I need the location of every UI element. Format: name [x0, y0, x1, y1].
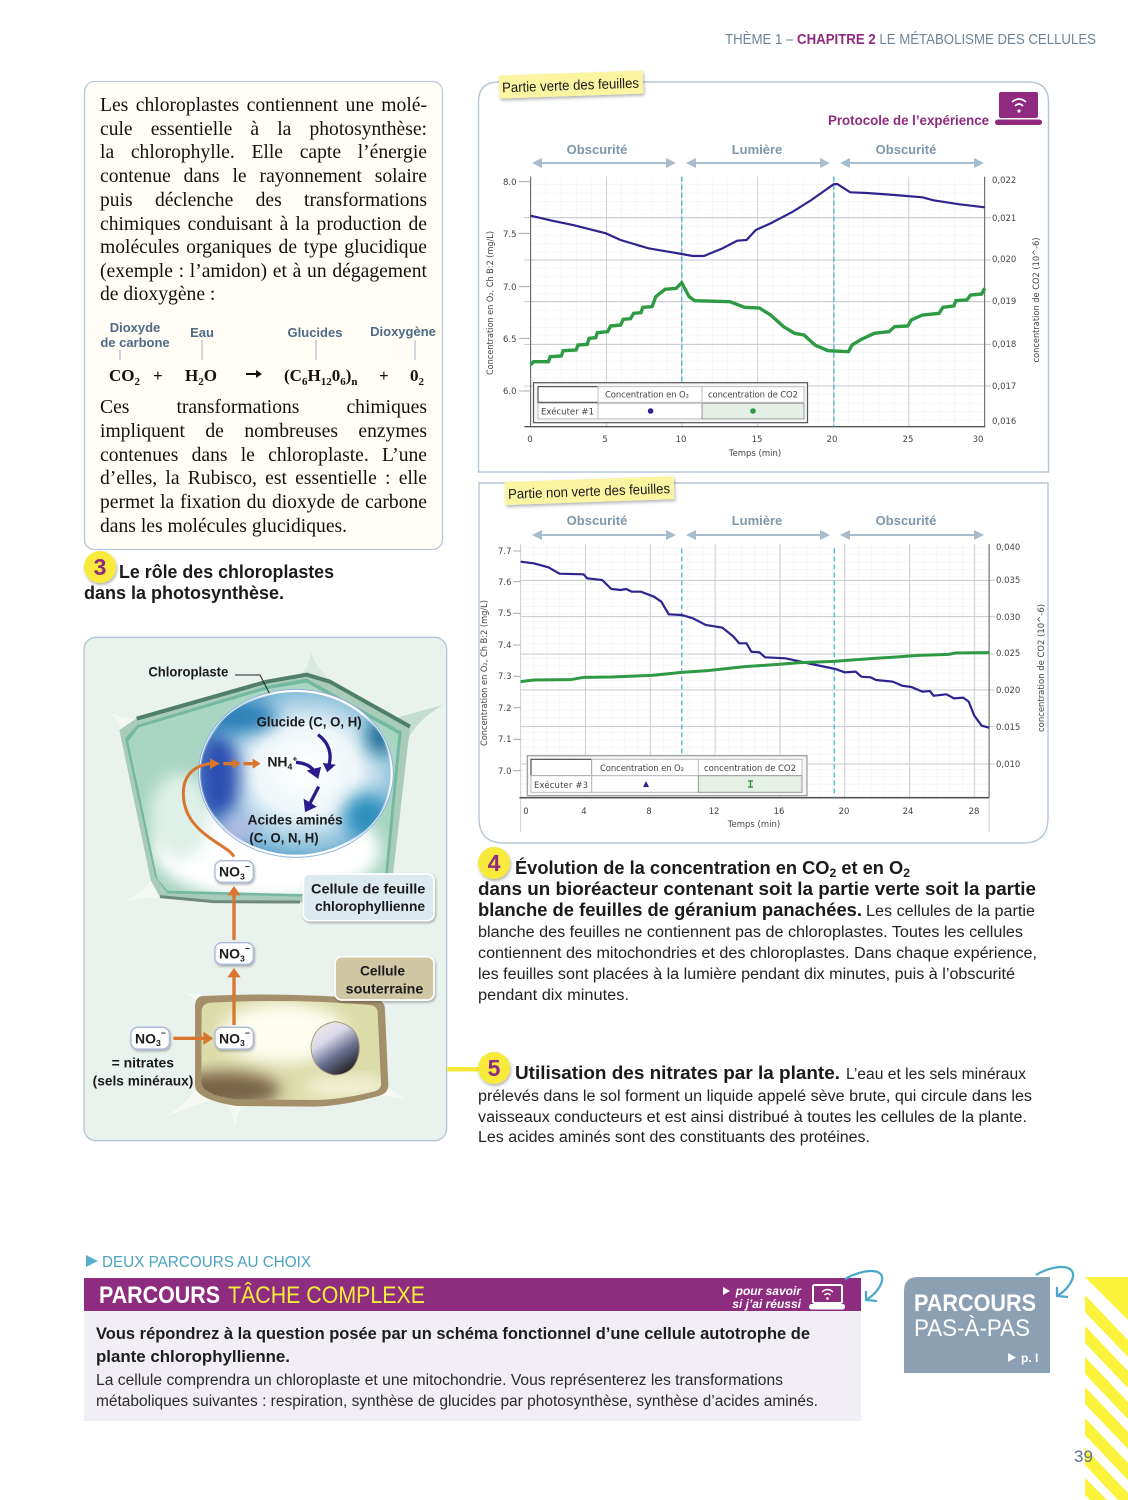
- equation of photosynthesis: Eau: [190, 325, 214, 340]
- text block: chloroplast introduction: la chlorophylle. Elle capte l’énergie: [100, 142, 427, 163]
- badge 5: 5: [488, 1055, 501, 1081]
- NO3 labels: 3: [156, 1038, 161, 1048]
- protocol link: Protocole de l’expérience: [828, 113, 989, 128]
- axis labels: 7.5: [503, 230, 517, 240]
- panel: parcours tâche complexe: PARCOURS: [99, 1282, 220, 1309]
- badge 3: 3: [94, 554, 106, 580]
- NO3 labels: 3: [240, 953, 245, 963]
- panel: parcours pas-à-pas: PARCOURS: [914, 1290, 1036, 1317]
- axis labels: 20: [839, 807, 849, 817]
- chloroplast: [198, 675, 393, 857]
- panel: parcours tâche complexe: TÂCHE COMPLEXE: [228, 1282, 425, 1309]
- equation of photosynthesis: +: [379, 366, 389, 385]
- axis labels: 0.025: [996, 649, 1020, 659]
- tag: non-green part: Partie non verte des feuilles: [508, 480, 670, 502]
- axis labels: 7.0: [503, 283, 517, 293]
- text block: chloroplast introduction: permet la fixation du dioxyde de carbone: [100, 492, 427, 513]
- labels inside diagram: +: [292, 753, 297, 763]
- NO3 labels: −: [161, 1028, 166, 1038]
- text block: chloroplast introduction: cule essentielle à la photosynthèse:: [100, 119, 427, 140]
- equation of photosynthesis: H: [185, 366, 198, 385]
- panel: parcours tâche complexe: plante chlorophyllienne.: [96, 1347, 290, 1366]
- chart: non-green part curves: [480, 543, 1047, 832]
- caption 4: et en O: [836, 858, 903, 878]
- phase headers: [532, 142, 984, 168]
- NO3 labels: −: [245, 861, 250, 871]
- axis labels: 7.6: [498, 578, 512, 588]
- phase headers: Obscurité: [567, 142, 627, 157]
- axis labels: 0: [523, 807, 529, 817]
- page number: 39: [1074, 1447, 1093, 1466]
- axis labels: 6.0: [503, 387, 517, 397]
- axis labels: 0,020: [992, 255, 1016, 265]
- equation of photosynthesis: Glucides: [288, 325, 342, 340]
- equation of photosynthesis: CO: [109, 366, 134, 385]
- NO3 labels: NO: [219, 946, 240, 962]
- purple arrows: [296, 735, 335, 812]
- panel: parcours tâche complexe: métaboliques suivantes : respiration, synthèse de glucides par photosynthèse, synthèse d’acides aminés.: [96, 1393, 818, 1410]
- labels inside diagram: = nitrates: [112, 1054, 174, 1070]
- equation of photosynthesis: 0: [410, 366, 418, 385]
- label: leaf cell: chlorophyllienne: [315, 898, 425, 914]
- label: underground cell: [335, 957, 434, 1000]
- phase headers: Obscurité: [876, 142, 936, 157]
- panel: chart frame green part: [478, 70, 1048, 472]
- axis labels: 0,017: [992, 382, 1016, 392]
- equation of photosynthesis: 0: [332, 366, 340, 385]
- equation of photosynthesis: n: [351, 376, 357, 388]
- caption 5: vaisseaux conducteurs et est ainsi distribué à toutes les cellules de la plante.: [478, 1109, 1027, 1126]
- labels inside diagram: (C, O, N, H): [249, 829, 319, 845]
- axis labels: 0,010: [996, 760, 1020, 770]
- axis labels: 0,022: [992, 176, 1016, 186]
- labels inside diagram: Acides aminés: [248, 811, 343, 827]
- NO3 labels: 3: [240, 871, 245, 881]
- NO3 labels: NO: [219, 864, 240, 880]
- equation of photosynthesis: 2: [198, 376, 204, 388]
- axis labels: 16: [774, 807, 784, 817]
- text block: chloroplast introduction: puis déclenche des transformations: [100, 190, 427, 211]
- axis labels: 10: [676, 435, 686, 445]
- equation of photosynthesis: 2: [418, 376, 424, 388]
- axis labels: concentration de CO2 (10^-6): [1032, 238, 1042, 362]
- axis labels: 0,018: [992, 340, 1016, 350]
- axis labels: 0.020: [996, 686, 1020, 696]
- caption 4: 2: [829, 866, 837, 880]
- equation of photosynthesis: 12: [321, 376, 332, 388]
- NO3 labels: NO: [135, 1030, 156, 1046]
- NO3 labels: 3: [240, 1038, 245, 1048]
- legend: Concentration en O₂: [600, 764, 684, 774]
- label: leaf cell: Cellule de feuille: [311, 880, 426, 896]
- axis labels: 7.0: [498, 767, 512, 777]
- chart: green part curves: [486, 176, 1042, 459]
- badge 4: [478, 847, 510, 879]
- axis labels: Concentration en O₂, Ch B:2 (mg/L): [480, 600, 490, 746]
- caption 4: 2: [903, 866, 910, 880]
- labels inside diagram: Glucide (C, O, H): [257, 714, 362, 730]
- nucleus: [311, 1022, 359, 1075]
- text block: chloroplast introduction: chimiques conduisant à la production de: [100, 214, 427, 235]
- text block: chloroplast introduction: contenue dans le rayonnement solaire: [100, 166, 427, 187]
- axis labels: 7.4: [498, 641, 512, 651]
- text block: chloroplast introduction: (exemple : l’amidon) et à un dégagement: [100, 261, 427, 282]
- axis labels: Concentration en O₂, Ch B:2 (mg/L): [486, 231, 496, 375]
- axis labels: 0,016: [992, 417, 1016, 427]
- equation of photosynthesis: 2: [134, 376, 140, 388]
- link: pour savoir: si j’ai réussi: [732, 1297, 802, 1311]
- axis labels: Temps (min): [728, 449, 781, 459]
- equation of photosynthesis: 6: [340, 376, 346, 388]
- root cell: [165, 992, 410, 1127]
- axis labels: 0: [527, 435, 533, 445]
- caption 5: prélevés dans le sol forment un liquide appelé sève brute, qui circule dans les: [478, 1088, 1032, 1105]
- page header: THÈME 1 – CHAPITRE 2 LE MÉTABOLISME DES CELLULES: [725, 31, 1096, 48]
- axis labels: 0,019: [992, 297, 1016, 307]
- equation of photosynthesis: (C: [284, 366, 302, 385]
- axis labels: concentration de CO2 (10^-6): [1037, 604, 1047, 732]
- caption 5: Les acides aminés sont des constituants des protéines.: [478, 1129, 870, 1146]
- panel: parcours pas-à-pas: PAS-À-PAS: [914, 1315, 1030, 1342]
- axis labels: 25: [903, 435, 913, 445]
- caption 4: [478, 847, 1037, 1004]
- label: leaf cell: [303, 874, 434, 921]
- text block: chloroplast introduction: d’elles, la Rubisco, est essentielle : elle: [100, 468, 427, 489]
- panel: chloroplast text box: [84, 82, 442, 550]
- axis labels: 7.3: [498, 672, 512, 682]
- text block: chloroplast introduction: dans les molécules glucidiques.: [100, 516, 347, 537]
- legend: Concentration en O₂: [605, 390, 689, 400]
- orange arrows: [173, 758, 261, 1045]
- caption 4: Les cellules de la partie: [866, 903, 1035, 920]
- phase headers: Obscurité: [567, 513, 627, 528]
- text block: chloroplast introduction: impliquent de nombreuses enzymes: [100, 421, 427, 442]
- axis labels: [486, 176, 1042, 459]
- axis labels: 12: [709, 807, 719, 817]
- panel: parcours pas-à-pas: p. I: [1021, 1351, 1038, 1365]
- caption 3: dans la photosynthèse.: [84, 583, 284, 603]
- text block: chloroplast introduction: [100, 91, 440, 541]
- panel: parcours tâche complexe: [84, 1278, 861, 1421]
- axis labels: 4: [581, 807, 587, 817]
- axis labels: 0,021: [992, 214, 1016, 224]
- equation of photosynthesis: [100, 320, 436, 388]
- axis labels: 7.2: [498, 704, 512, 714]
- equation of photosynthesis: Dioxyde: [110, 320, 160, 335]
- panel: parcours tâche complexe: La cellule comprendra un chloroplaste et une mitochondrie. Vous représenterez les transformations: [96, 1372, 783, 1389]
- axis labels: 30: [973, 435, 983, 445]
- labels inside diagram: [93, 664, 362, 1089]
- NO3 labels: −: [245, 943, 250, 953]
- NO3 labels: −: [245, 1028, 250, 1038]
- caption 5: [447, 1052, 1032, 1146]
- axis labels: 8.0: [503, 178, 517, 188]
- link: pour savoir: pour savoir: [735, 1284, 802, 1298]
- caption 4: les feuilles sont placées à la lumière pendant dix minutes, puis à l’obscurité: [478, 966, 1015, 983]
- axis labels: [480, 543, 1047, 830]
- text block: chloroplast introduction: molécules organiques de type glucidique: [100, 237, 427, 258]
- equation of photosynthesis: Dioxygène: [370, 324, 436, 339]
- legend: concentration de CO2: [704, 764, 796, 774]
- text block: chloroplast introduction: Les chloroplastes contiennent une molé-: [100, 95, 427, 116]
- equation of photosynthesis: O: [204, 366, 217, 385]
- section label: DEUX PARCOURS AU CHOIX: [102, 1254, 311, 1271]
- labels inside diagram: 4: [288, 761, 293, 771]
- badge 3: [84, 551, 116, 583]
- panel: parcours pas-à-pas: [904, 1277, 1050, 1373]
- panel: nitrate diagram: [84, 637, 447, 1141]
- caption 5: Utilisation des nitrates par la plante.: [515, 1063, 840, 1083]
- axis labels: 15: [752, 435, 762, 445]
- phase headers: Lumière: [732, 142, 782, 157]
- badge 4: 4: [488, 850, 501, 876]
- caption 5: L’eau et les sels minéraux: [846, 1066, 1026, 1083]
- equation of photosynthesis: 6: [302, 376, 308, 388]
- labels inside diagram: (sels minéraux): [93, 1073, 193, 1089]
- labels inside diagram: NH: [267, 754, 288, 770]
- NO3 labels: NO: [219, 1030, 240, 1046]
- equation of photosynthesis: ): [346, 366, 351, 385]
- NO3 labels: [131, 861, 253, 1049]
- tag: green part: Partie verte des feuilles: [502, 75, 639, 95]
- caption 4: pendant dix minutes.: [478, 987, 629, 1004]
- legend: [527, 756, 807, 796]
- legend: Exécuter #3: [534, 780, 588, 791]
- legend: Exécuter #1: [541, 406, 594, 418]
- axis labels: 0.035: [996, 576, 1020, 586]
- phase headers: Lumière: [732, 513, 782, 528]
- caption 3: [84, 551, 334, 603]
- equation of photosynthesis: +: [153, 366, 163, 385]
- axis labels: 6.5: [503, 335, 517, 345]
- axis labels: 0,040: [996, 543, 1020, 553]
- arrow: curl to pas-à-pas: [1036, 1267, 1073, 1297]
- arrow: curl to parcours: [845, 1271, 882, 1301]
- panel: chart frame non-green part: [479, 476, 1048, 843]
- caption 4: blanche des feuilles ne contiennent pas de chloroplastes. Toutes les cellules: [478, 924, 1023, 941]
- protocol link: [828, 92, 1042, 128]
- axis labels: 7.7: [498, 547, 512, 557]
- axis labels: 0.030: [996, 613, 1020, 623]
- legend: [534, 383, 808, 423]
- text block: chloroplast introduction: contenues dans le chloroplaste. L’une: [100, 445, 427, 466]
- panel: parcours tâche complexe: Vous répondrez à la question posée par un schéma fonctionnel d’une cellule autotrophe de: [96, 1324, 810, 1343]
- caption 4: blanche de feuilles de géranium panachées.: [478, 900, 862, 920]
- axis labels: 7.1: [498, 735, 512, 745]
- equation of photosynthesis: de carbone: [100, 335, 170, 350]
- caption 4: dans un bioréacteur contenant soit la partie verte soit la partie: [478, 879, 1036, 899]
- legend: concentration de CO2: [708, 390, 798, 400]
- axis labels: 24: [903, 807, 913, 817]
- label: underground cell: Cellule: [360, 963, 405, 979]
- caption 3: Le rôle des chloroplastes: [119, 562, 334, 582]
- caption 4: Évolution de la concentration en CO: [515, 858, 825, 878]
- labels inside diagram: Chloroplaste: [148, 664, 229, 680]
- axis labels: 0.015: [996, 723, 1020, 733]
- text block: chloroplast introduction: Ces transformations chimiques: [100, 397, 427, 418]
- caption 4: contiennent des mitochondries et des chloroplastes. Dans chaque expérience,: [478, 945, 1037, 962]
- leaf cell: [108, 650, 443, 903]
- link: pour savoir: [723, 1284, 845, 1311]
- axis labels: 8: [646, 807, 652, 817]
- label: underground cell: souterraine: [346, 980, 424, 996]
- text block: chloroplast introduction: de dioxygène :: [100, 284, 215, 305]
- decorative yellow stripes: [1085, 1277, 1128, 1500]
- axis labels: 28: [969, 807, 979, 817]
- equation of photosynthesis: H: [307, 366, 321, 385]
- axis labels: Temps (min): [727, 820, 780, 830]
- phase headers: [532, 513, 984, 540]
- axis labels: 5: [602, 435, 608, 445]
- phase headers: Obscurité: [876, 513, 936, 528]
- axis labels: 7.5: [498, 609, 512, 619]
- badge 5: [478, 1052, 510, 1084]
- axis labels: 20: [827, 435, 837, 445]
